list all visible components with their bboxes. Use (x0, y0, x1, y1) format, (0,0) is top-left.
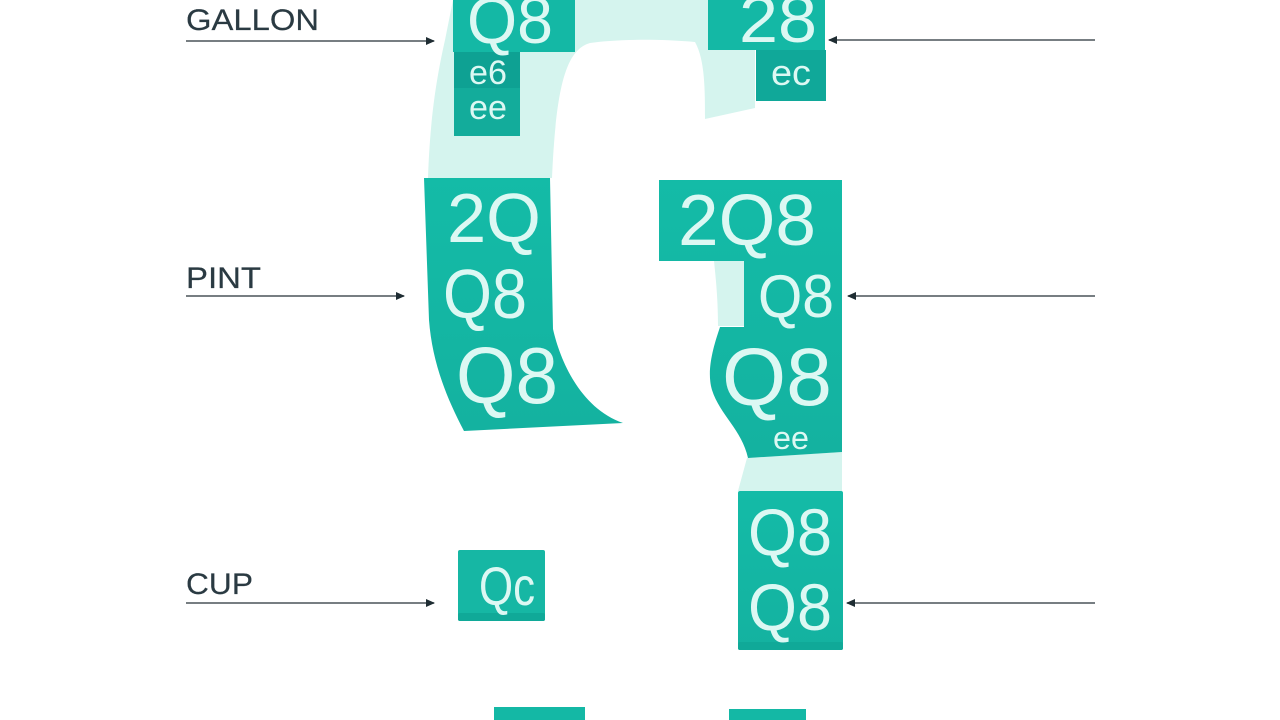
pale connector right lower (738, 452, 842, 491)
cup block: Qc (479, 557, 535, 617)
pint right stacked blocks: ee (773, 420, 809, 456)
pale connector right middle (714, 261, 744, 326)
pint left stacked blocks: Q8 (456, 331, 558, 420)
pint right stacked blocks (659, 180, 842, 458)
pint right stacked blocks: Q8 (722, 332, 832, 423)
arrow: gallon right (829, 39, 1095, 41)
gallon left blocks: e6 (469, 54, 507, 92)
quart stack (738, 491, 843, 650)
pint right stacked blocks: Q8 (758, 263, 834, 330)
gallon right blocks (708, 0, 826, 101)
bottom right block (729, 709, 806, 720)
cup block (458, 550, 545, 621)
background silhouette: pale container (428, 0, 755, 178)
arrow: cup right (847, 602, 1095, 604)
gallon left blocks: ee (469, 89, 507, 127)
arrow: pint right (848, 295, 1095, 297)
bottom left block (494, 707, 585, 720)
gallon right blocks: ec (771, 52, 811, 93)
pint left stacked blocks: Q8 (443, 255, 527, 333)
pint left stacked blocks: 2Q (447, 179, 541, 257)
label: cup: CUP (186, 568, 253, 601)
label: gallon: GALLON (186, 4, 319, 37)
quart stack: Q8 (748, 570, 832, 644)
label: pint: PINT (186, 262, 261, 295)
pint right stacked blocks: 2Q8 (678, 181, 816, 261)
pint left stacked blocks (424, 178, 623, 431)
quart stack: Q8 (748, 495, 832, 569)
gallon left blocks (453, 0, 575, 136)
